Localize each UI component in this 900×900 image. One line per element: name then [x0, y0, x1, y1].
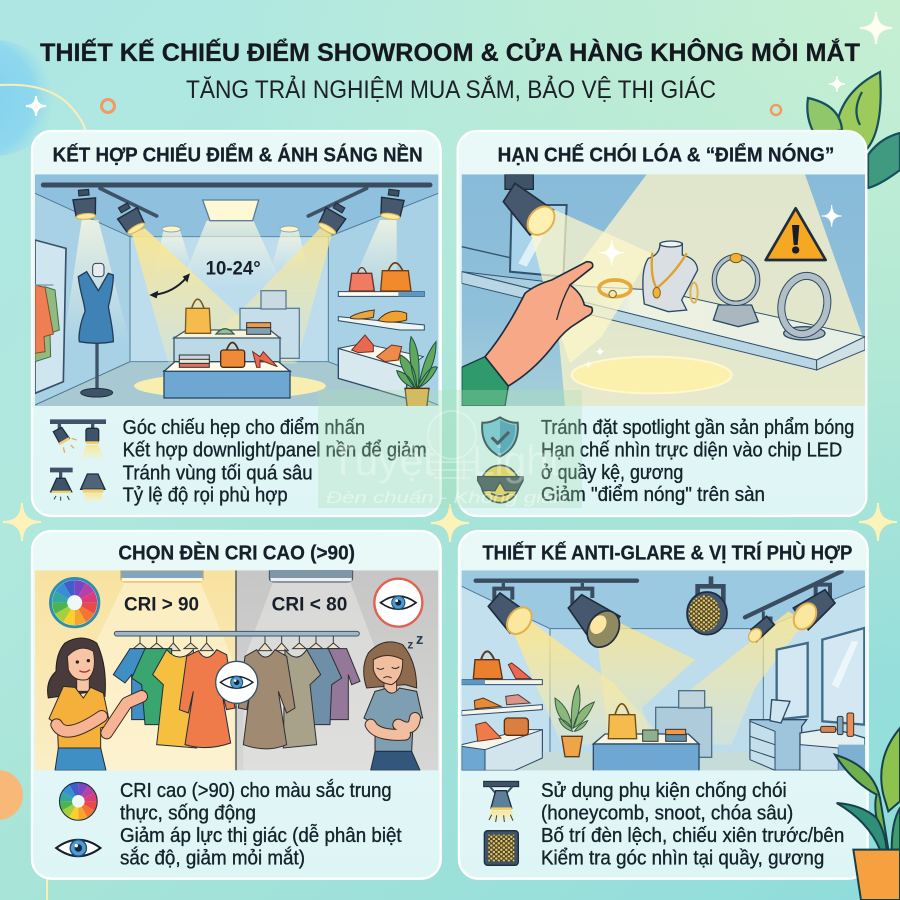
woman: happy	[48, 638, 142, 770]
panel: high CRI lights	[32, 531, 441, 879]
clothing rail with hangers	[114, 631, 359, 651]
track spotlight 2 with snoot	[567, 583, 622, 648]
subtitle: TĂNG TRẢI NGHIỆM MUA SẮM, BẢO VỆ THỊ GIÁC	[186, 74, 716, 104]
text: bullet list: Bố trí đèn lệch, chiếu xiên trước/bên	[541, 825, 844, 847]
decorative sparkles	[3, 12, 897, 542]
text: bullet list: Giảm áp lực thị giác (dễ phân biệt	[120, 824, 402, 847]
icon: honeycomb filter	[484, 831, 518, 865]
heading: HẠN CHẾ CHÓI LÓA & “ĐIỂM NÓNG”	[498, 143, 834, 167]
text: bullet list	[541, 417, 854, 506]
label: beam angle: 10-24°	[206, 258, 261, 279]
heading: KẾT HỢP CHIẾU ĐIỂM & ÁNH SÁNG NỀN	[53, 144, 423, 167]
mirror	[510, 205, 567, 277]
text: bullet list: Hạn chế nhìn trực diện vào chip LED	[541, 440, 842, 462]
text: bullet list: Tránh đặt spotlight gần sản phẩm bóng	[541, 417, 854, 439]
display table	[593, 704, 699, 772]
sparkles	[584, 205, 842, 369]
panel: limit glare and hot spots	[458, 131, 866, 516]
labels: CRI < 80	[272, 595, 347, 616]
illustration: CRI comparison	[35, 570, 438, 770]
panel: anti-glare and placement	[459, 531, 900, 900]
heading: CHỌN ĐÈN CRI CAO (>90)	[118, 542, 355, 565]
mirror and clothes	[35, 240, 66, 393]
icon: track spotlights	[50, 422, 106, 458]
hand	[462, 262, 593, 406]
icon: sunglasses face	[478, 465, 523, 503]
text: bullet list: Sử dụng phụ kiện chống chói	[541, 780, 787, 802]
back counter	[240, 291, 299, 358]
vanity counters	[750, 700, 865, 770]
illustration: showroom with anti-glare lights	[462, 570, 865, 772]
icon: colour wheel badge	[50, 578, 99, 627]
jewellery: large ring	[776, 272, 833, 340]
text: bullet list: ở quầy kệ, gương	[541, 462, 683, 484]
text: bullet list: Tránh vùng tối quá sâu	[123, 462, 313, 484]
icon: downlights	[50, 470, 105, 502]
hot spot	[572, 357, 732, 393]
arrow: beam angle	[149, 273, 190, 298]
spotlight	[502, 174, 556, 236]
text: bullet list	[541, 780, 844, 870]
icon: eye	[56, 840, 100, 856]
mannequin	[78, 263, 113, 397]
text: bullet list: Kiểm tra góc nhìn tại quầy, gương	[541, 848, 824, 870]
jewellery: ring on stand	[713, 253, 758, 327]
plant	[555, 685, 594, 757]
text: bullet list: Kết hợp downlight/panel nền để giảm	[123, 440, 427, 462]
jewellery: bracelet	[599, 280, 631, 298]
text: bullet list: CRI cao (>90) cho màu sắc trung	[120, 779, 392, 802]
watermark: Light	[472, 437, 560, 484]
display tables	[164, 299, 290, 398]
ceiling rails	[476, 571, 842, 617]
icon: shield	[482, 417, 518, 457]
woman: tired: z	[416, 632, 423, 648]
text: bullet list: Giảm "điểm nóng" trên sàn	[541, 484, 765, 506]
small track spotlight	[746, 611, 774, 645]
text: bullet list: Tỷ lệ độ rọi phù hợp	[123, 485, 288, 507]
icon: central eye	[216, 661, 258, 703]
heading: THIẾT KẾ ANTI-GLARE & VỊ TRÍ PHÙ HỢP	[482, 541, 853, 565]
illustration: showroom	[35, 174, 438, 408]
plant: top right leaves	[807, 72, 900, 188]
dull garments	[238, 649, 360, 749]
track spotlight 1	[487, 583, 533, 635]
text: bullet list: thực, sống động	[120, 803, 256, 825]
text: bullet list: Góc chiếu hẹp cho điểm nhấn	[123, 417, 365, 439]
icon: colour wheel	[59, 782, 97, 820]
icon: anti-glare track light	[484, 781, 519, 822]
plant pot	[853, 850, 900, 900]
title: THIẾT KẾ CHIẾU ĐIỂM SHOWROOM & CỬA HÀNG KHÔNG MỎI MẮT	[40, 37, 860, 67]
labels	[124, 597, 347, 610]
counter and monitor	[656, 691, 712, 757]
track spotlight 4	[789, 585, 835, 634]
panel: combine spot and ambient light	[32, 131, 441, 516]
right shelves	[338, 263, 424, 398]
light beam	[530, 210, 652, 363]
plant: bottom right potted plant	[835, 728, 900, 850]
watermark: Tuyệt	[330, 437, 435, 484]
watermark	[318, 390, 582, 508]
coloured garments	[113, 649, 235, 748]
watermark: Đèn chuẩn - Không gian	[326, 488, 566, 507]
honeycomb spotlight	[687, 576, 727, 635]
text: bullet list: (honeycomb, snoot, chóa sâu)	[541, 803, 793, 825]
jewellery: necklace bust	[643, 241, 698, 312]
text: bullet list: sắc độ, giảm mỏi mắt)	[120, 847, 305, 870]
illustration: glare on jewellery shelf	[462, 174, 865, 406]
woman: tired	[364, 632, 423, 770]
labels: CRI > 90	[124, 595, 199, 616]
woman: tired: z	[407, 638, 413, 652]
icon: eye badge	[374, 579, 422, 627]
mirrors	[777, 628, 864, 725]
text: bullet list	[123, 417, 427, 507]
icon: warning triangle	[766, 208, 826, 260]
left shelves	[462, 651, 542, 770]
text: bullet list	[120, 779, 402, 870]
plant	[397, 337, 437, 408]
